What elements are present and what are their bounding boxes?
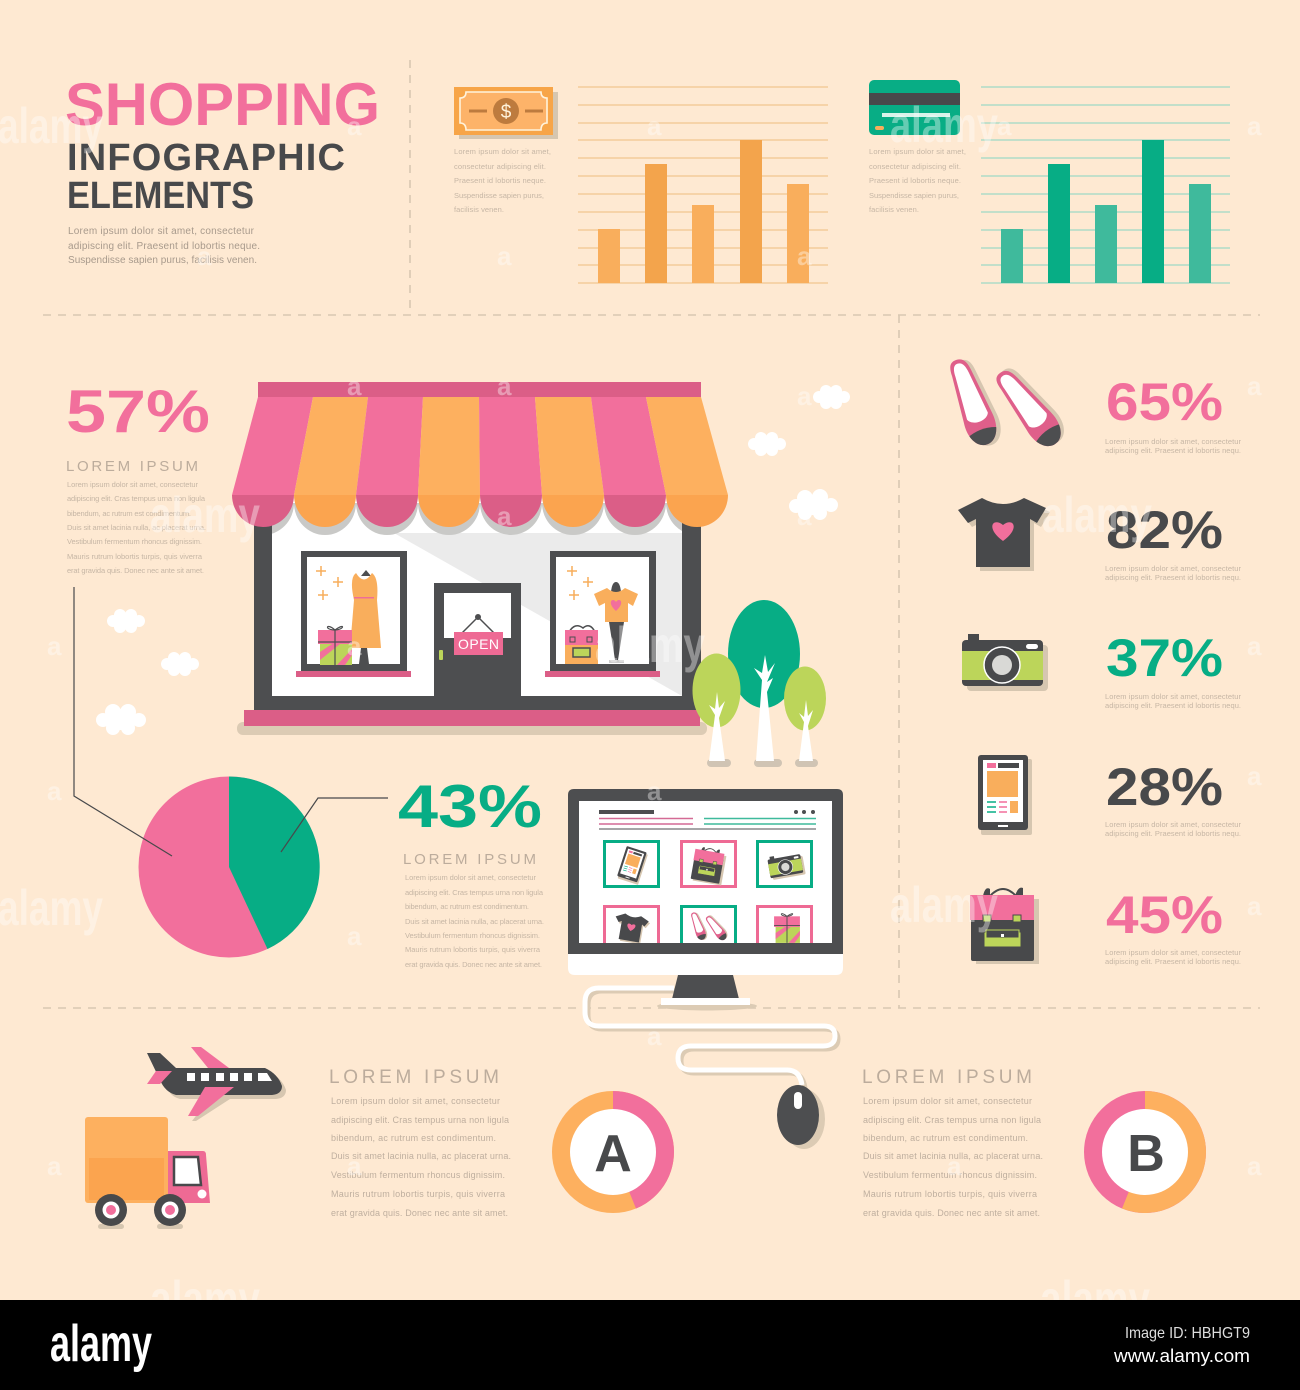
- text block: bottom right: Mauris rutrum lobortis turpis, quis viverra: [863, 1189, 1037, 1199]
- door: OPEN: [458, 636, 499, 652]
- icon: banknote: $: [501, 102, 512, 123]
- text block: bottom right: bibendum, ac rutrum est condimentum.: [863, 1133, 1028, 1143]
- watermarks: a: [797, 501, 812, 531]
- watermarks: alamy: [595, 617, 705, 673]
- mouse: [777, 1085, 825, 1149]
- text under banknote: Suspendisse sapien purus,: [454, 191, 544, 200]
- text under banknote: Lorem ipsum dolor sit amet,: [454, 147, 551, 156]
- stat: 37%: [1105, 629, 1242, 710]
- plinth: [244, 710, 700, 726]
- stat: 28%: 28%: [1106, 758, 1223, 817]
- stat: 65%: 65%: [1106, 373, 1223, 432]
- stat: 43%: bibendum, ac rutrum est condimentum.: [405, 902, 529, 911]
- text block: bottom left: Lorem ipsum dolor sit amet, consectetur: [331, 1096, 500, 1106]
- watermarks: a: [497, 501, 512, 531]
- watermarks: a: [47, 1151, 62, 1181]
- watermarks: alamy: [0, 880, 103, 936]
- stat: 43%: Mauris rutrum lobortis turpis, quis viverra: [405, 945, 541, 954]
- web page: [599, 810, 816, 952]
- icon: tablet: [978, 755, 1032, 835]
- stat: 82%: [1105, 501, 1242, 582]
- watermarks: a: [47, 776, 62, 806]
- text block: bottom left: Vestibulum fermentum rhoncus dignissim.: [331, 1170, 505, 1180]
- stat: 82%: Lorem ipsum dolor sit amet, consectetur: [1105, 564, 1242, 573]
- stat: 82%: 82%: [1106, 501, 1223, 560]
- text block: bottom right: Lorem ipsum dolor sit amet, consectetur: [863, 1096, 1032, 1106]
- watermarks: alamy: [1042, 487, 1152, 543]
- donut: B: [1084, 1091, 1206, 1213]
- title: INFOGRAPHIC: [67, 137, 345, 179]
- icon: backpack: [970, 888, 1039, 964]
- watermarks: a: [797, 381, 812, 411]
- stat: 37%: 37%: [1106, 629, 1223, 688]
- intro text: [68, 226, 260, 266]
- watermarks: a: [197, 241, 212, 271]
- text block: bottom right: [862, 1067, 1043, 1218]
- stat: 57%: LOREM IPSUM: [66, 458, 198, 475]
- stand: [657, 1002, 757, 1010]
- text block: bottom left: adipiscing elit. Cras tempus urna non ligula: [331, 1115, 509, 1125]
- left window: [296, 551, 411, 677]
- footer bar: Image ID: HBHGT9: [1125, 1325, 1250, 1342]
- stat: 45%: 45%: [1106, 886, 1223, 945]
- text block: bottom left: bibendum, ac rutrum est condimentum.: [331, 1133, 496, 1143]
- text under credit card: Lorem ipsum dolor sit amet,: [869, 147, 966, 156]
- stat: 43%: erat gravida quis. Donec nec ante sit amet.: [405, 960, 542, 969]
- watermarks: a: [347, 921, 362, 951]
- stat: 57%: 57%: [66, 378, 210, 445]
- stat: 57%: bibendum, ac rutrum est condimentum.: [67, 509, 191, 518]
- icon: delivery truck: [85, 1117, 210, 1229]
- stat: 43%: Lorem ipsum dolor sit amet, consectetur: [405, 873, 536, 882]
- right window: [545, 551, 660, 677]
- storefront: [232, 382, 728, 735]
- text block: bottom left: erat gravida quis. Donec nec ante sit amet.: [331, 1208, 508, 1218]
- donut: B: B: [1127, 1125, 1165, 1183]
- cable: [588, 991, 838, 1088]
- title: ELEMENTS: [67, 175, 254, 217]
- watermarks: alamy: [150, 487, 260, 543]
- top band: [258, 382, 701, 397]
- text block: bottom right: Vestibulum fermentum rhoncus dignissim.: [863, 1170, 1037, 1180]
- watermarks: a: [647, 111, 662, 141]
- stat: 57%: [66, 378, 210, 575]
- text block: bottom left: LOREM IPSUM: [329, 1067, 499, 1088]
- text under banknote: consectetur adipiscing elit.: [454, 162, 546, 171]
- watermarks: a: [1247, 371, 1262, 401]
- stat: 37%: Lorem ipsum dolor sit amet, consectetur: [1105, 692, 1242, 701]
- stat: 45%: adipiscing elit. Praesent id lobortis nequ.: [1105, 957, 1241, 966]
- watermarks: alamy: [0, 98, 103, 154]
- bar chart: green: [981, 87, 1230, 283]
- watermarks: a: [347, 631, 362, 661]
- stat: 57%: erat gravida quis. Donec nec ante sit amet.: [67, 566, 204, 575]
- text under credit card: Praesent id lobortis neque.: [869, 176, 961, 185]
- awning: [232, 397, 728, 527]
- stat: 43%: LOREM IPSUM: [403, 851, 536, 868]
- icon: airplane: [147, 1047, 286, 1121]
- donut: A: A: [594, 1125, 632, 1183]
- icon: t-shirt: [958, 498, 1050, 571]
- stat: 57%: adipiscing elit. Cras tempus urna non ligula: [67, 494, 206, 503]
- text under credit card: Suspendisse sapien purus,: [869, 191, 959, 200]
- donut: A: [552, 1091, 674, 1213]
- watermarks: a: [647, 1021, 662, 1051]
- text block: bottom right: LOREM IPSUM: [862, 1067, 1032, 1088]
- watermarks: a: [797, 241, 812, 271]
- door: [434, 583, 521, 710]
- stat: 45%: Lorem ipsum dolor sit amet, consectetur: [1105, 948, 1242, 957]
- text block: bottom left: Mauris rutrum lobortis turpis, quis viverra: [331, 1189, 505, 1199]
- footer bar: alamy: [50, 1315, 152, 1373]
- text block: bottom right: Duis sit amet lacinia nulla, ac placerat urna.: [863, 1151, 1043, 1161]
- text block: bottom right: erat gravida quis. Donec nec ante sit amet.: [863, 1208, 1040, 1218]
- stat: 65%: Lorem ipsum dolor sit amet, consectetur: [1105, 437, 1242, 446]
- footer bar: www.alamy.com: [1113, 1346, 1250, 1366]
- stat: 43%: adipiscing elit. Cras tempus urna non ligula: [405, 888, 544, 897]
- text under banknote: [454, 147, 551, 214]
- text block: bottom left: Duis sit amet lacinia nulla, ac placerat urna.: [331, 1151, 511, 1161]
- title: SHOPPING: [65, 71, 380, 138]
- watermarks: alamy: [150, 1271, 260, 1327]
- watermarks: a: [1247, 1151, 1262, 1181]
- icon: banknote: [454, 87, 558, 139]
- bar chart: orange: [578, 87, 828, 283]
- watermarks: a: [947, 1151, 962, 1181]
- text under credit card: consectetur adipiscing elit.: [869, 162, 961, 171]
- stat: 57%: Mauris rutrum lobortis turpis, quis viverra: [67, 552, 203, 561]
- intro text: Suspendisse sapien purus, facilisis venen.: [68, 255, 257, 266]
- text under credit card: [869, 147, 966, 214]
- stat: 43%: [398, 773, 544, 969]
- watermarks: a: [347, 1151, 362, 1181]
- text under banknote: Praesent id lobortis neque.: [454, 176, 546, 185]
- stat: 65%: [1105, 373, 1242, 455]
- watermarks: a: [1247, 891, 1262, 921]
- stat: 43%: 43%: [398, 773, 542, 840]
- watermarks: a: [47, 631, 62, 661]
- stat: 28%: Lorem ipsum dolor sit amet, consectetur: [1105, 820, 1242, 829]
- watermarks: a: [1247, 761, 1262, 791]
- intro text: adipiscing elit. Praesent id lobortis neque.: [68, 241, 260, 252]
- intro text: Lorem ipsum dolor sit amet, consectetur: [68, 226, 255, 237]
- title: [65, 71, 380, 217]
- text under banknote: facilisis venen.: [454, 205, 504, 214]
- footer bar: [0, 1300, 1300, 1390]
- watermarks: alamy: [890, 877, 998, 933]
- stat: 57%: Vestibulum fermentum rhoncus dignissim.: [67, 537, 202, 546]
- clouds: [96, 385, 850, 735]
- base shadow: [237, 722, 707, 735]
- trees: [692, 600, 826, 767]
- watermarks: a: [997, 111, 1012, 141]
- stat: 43%: Vestibulum fermentum rhoncus dignissim.: [405, 931, 540, 940]
- pie chart: [74, 587, 388, 958]
- stat: 82%: adipiscing elit. Praesent id lobortis nequ.: [1105, 573, 1241, 582]
- stat: 65%: adipiscing elit. Praesent id lobortis nequ.: [1105, 446, 1241, 455]
- awning shadow: [272, 503, 682, 535]
- building walls: [254, 500, 701, 710]
- stat: 28%: adipiscing elit. Praesent id lobortis nequ.: [1105, 829, 1241, 838]
- watermarks: a: [347, 371, 362, 401]
- stat: 45%: [1105, 886, 1242, 966]
- body: [568, 789, 843, 954]
- text block: bottom left: [329, 1067, 511, 1218]
- stat: 57%: Duis sit amet lacinia nulla, ac placerat urna.: [67, 523, 206, 532]
- stat: 37%: adipiscing elit. Praesent id lobortis nequ.: [1105, 701, 1241, 710]
- stat: 57%: Lorem ipsum dolor sit amet, consectetur: [67, 480, 198, 489]
- icon: credit card: [869, 80, 960, 135]
- watermarks: a: [497, 241, 512, 271]
- icon: shoes: [941, 353, 1072, 456]
- watermarks: a: [347, 111, 362, 141]
- watermarks: a: [647, 776, 662, 806]
- watermarks: a: [497, 371, 512, 401]
- stat: 28%: [1105, 758, 1242, 838]
- text block: bottom right: adipiscing elit. Cras tempus urna non ligula: [863, 1115, 1041, 1125]
- text under credit card: facilisis venen.: [869, 205, 919, 214]
- stat: 43%: Duis sit amet lacinia nulla, ac placerat urna.: [405, 917, 544, 926]
- icon: camera: [962, 634, 1048, 691]
- watermarks: a: [1247, 631, 1262, 661]
- watermarks: a: [1247, 111, 1262, 141]
- monitor: [568, 789, 843, 1088]
- watermarks: alamy: [1040, 1271, 1150, 1327]
- watermarks: alamy: [890, 97, 998, 153]
